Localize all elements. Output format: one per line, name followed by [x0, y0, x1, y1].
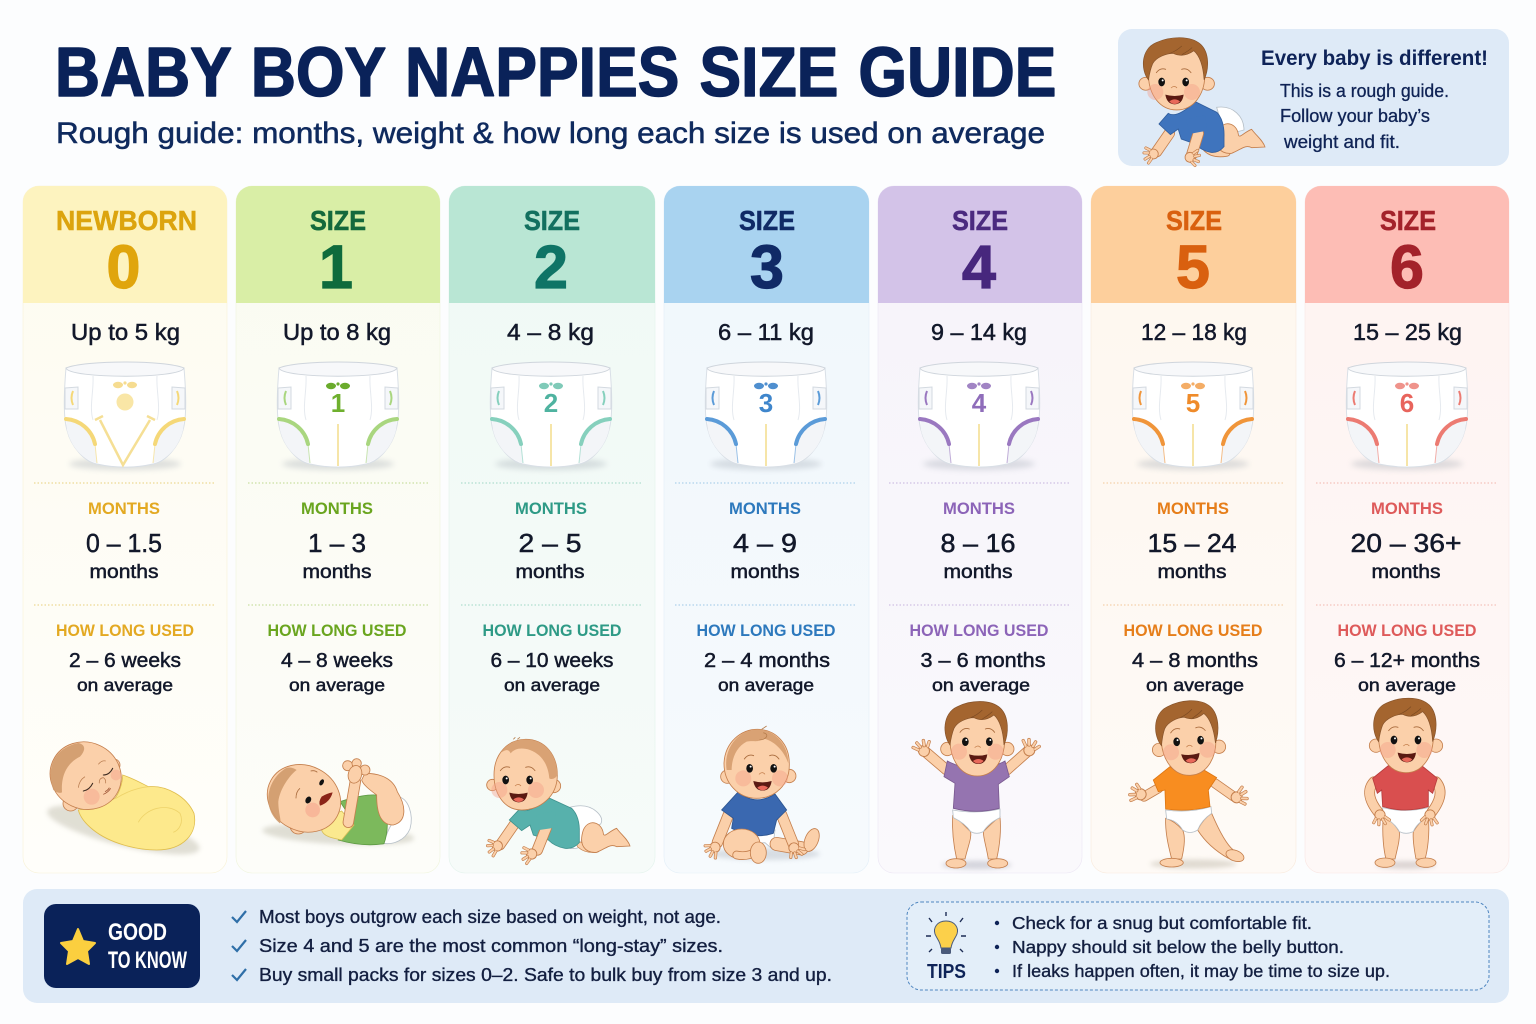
months: 1 – 3	[308, 528, 366, 558]
panel: size 6	[1305, 186, 1509, 873]
header: size 1: 1	[319, 233, 353, 301]
header: size 5: SIZE	[1166, 205, 1222, 236]
panel: every baby is different	[1118, 29, 1509, 166]
months: MONTHS	[1157, 500, 1229, 518]
months: MONTHS	[1371, 500, 1443, 518]
months: months	[516, 562, 584, 583]
header: size 3: 3	[750, 233, 784, 301]
months	[301, 500, 373, 583]
panel: size 4	[878, 186, 1082, 873]
header: newborn	[23, 186, 227, 303]
text: rough guide note	[1280, 81, 1449, 152]
header: size 3	[664, 186, 869, 303]
header: size 6	[1305, 186, 1509, 303]
months	[86, 500, 162, 583]
header: size 4: 4	[962, 233, 996, 301]
illustration: toddler arms raised	[912, 701, 1040, 869]
months: 2 – 5	[518, 528, 582, 558]
months	[729, 500, 801, 583]
nappy illustration	[277, 362, 399, 470]
header: size 2: 2	[534, 233, 568, 301]
months: months	[944, 562, 1012, 583]
months: 20 – 36+	[1350, 528, 1462, 558]
how long used: 4 – 8 weeks	[281, 649, 393, 672]
panel: tips	[907, 902, 1489, 990]
how long used: on average	[1146, 675, 1244, 695]
months: MONTHS	[88, 500, 160, 518]
nappy illustration	[918, 362, 1040, 470]
months: MONTHS	[515, 500, 587, 518]
text: rough guide note: Follow your baby’s	[1280, 106, 1430, 126]
how long used	[910, 622, 1049, 695]
months: months	[1372, 562, 1440, 583]
panel: size 5	[1091, 186, 1296, 873]
how long used: HOW LONG USED	[1338, 622, 1477, 640]
weight: Up to 5 kg	[71, 319, 180, 345]
months: 15 – 24	[1148, 528, 1236, 558]
header: size 5: 5	[1176, 233, 1210, 301]
months	[940, 500, 1016, 583]
months: 8 – 16	[940, 528, 1016, 558]
months: MONTHS	[943, 500, 1015, 518]
months: months	[1158, 562, 1226, 583]
months: months	[730, 562, 800, 583]
text: rough guide note: weight and fit.	[1283, 132, 1400, 152]
how long used: on average	[77, 675, 173, 695]
nappy illustration	[490, 362, 612, 470]
badge: good to know	[44, 904, 200, 988]
how long used: HOW LONG USED	[696, 622, 836, 640]
how long used	[56, 622, 194, 695]
panel: size 1	[236, 186, 440, 873]
how long used: HOW LONG USED	[482, 622, 622, 640]
header: newborn: 0	[107, 233, 140, 301]
how long used: HOW LONG USED	[56, 622, 194, 640]
header: size 2: SIZE	[524, 205, 580, 236]
nappy illustration: 4	[972, 388, 987, 418]
months: months	[302, 562, 372, 583]
header: size 4: SIZE	[952, 205, 1008, 236]
how long used: on average	[932, 675, 1030, 695]
badge: good to know: TO KNOW	[108, 947, 187, 974]
illustration: toddler walking	[1128, 699, 1248, 869]
header: size 4	[878, 186, 1082, 303]
panel: newborn size 0	[23, 186, 227, 873]
header: size 6: 6	[1390, 233, 1424, 301]
header: size 1: SIZE	[310, 205, 366, 236]
text: rough guide note: This is a rough guide.	[1280, 81, 1449, 101]
how long used: HOW LONG USED	[910, 622, 1049, 640]
weight: 6 – 11 kg	[718, 319, 814, 345]
weight: 15 – 25 kg	[1353, 319, 1462, 345]
weight: 12 – 18 kg	[1141, 319, 1247, 345]
panel: size 3	[664, 186, 869, 873]
list: good to know points: Size 4 and 5 are the most common “long-stay” sizes.	[259, 936, 723, 956]
list: tips: If leaks happen often, it may be time to size up.	[1012, 961, 1390, 981]
nappy illustration: 5	[1186, 388, 1200, 418]
weight: Up to 8 kg	[283, 319, 391, 345]
illustration: crawling baby	[486, 737, 630, 864]
how long used: on average	[289, 675, 385, 695]
months	[1148, 500, 1236, 583]
list: good to know points: Most boys outgrow each size based on weight, not age.	[259, 907, 721, 927]
how long used: on average	[504, 675, 600, 695]
header: size 6: SIZE	[1380, 205, 1436, 236]
months	[1350, 500, 1462, 583]
months	[515, 500, 587, 583]
how long used	[268, 622, 407, 695]
how long used: 6 – 10 weeks	[490, 649, 614, 672]
nappy illustration: 1	[331, 388, 345, 418]
nappy illustration: 3	[759, 388, 773, 418]
nappy illustration	[705, 362, 827, 470]
header: size 3: SIZE	[739, 205, 795, 236]
weight: 9 – 14 kg	[931, 319, 1027, 345]
illustration: baby lying on back	[255, 752, 415, 848]
how long used: 2 – 4 months	[704, 649, 830, 672]
panel: bottom notes	[23, 889, 1509, 1003]
nappy illustration: 6	[1400, 388, 1414, 418]
header: size 1	[236, 186, 440, 303]
list: tips	[995, 913, 1390, 981]
weight: 4 – 8 kg	[507, 319, 594, 345]
how long used	[696, 622, 836, 695]
list: good to know points: Buy small packs for sizes 0–2. Safe to bulk buy from size 3 and up.	[259, 965, 832, 985]
header: size 5	[1091, 186, 1296, 303]
months: MONTHS	[301, 500, 373, 518]
header: newborn: NEWBORN	[56, 205, 197, 236]
icon: lightbulb	[926, 912, 966, 954]
nappy illustration	[1132, 362, 1254, 470]
illustration: swaddled newborn	[39, 730, 203, 864]
list: good to know points	[232, 907, 832, 985]
panel: tips: TIPS	[927, 961, 966, 983]
header: size 2	[449, 186, 655, 303]
how long used: 6 – 12+ months	[1334, 649, 1480, 672]
badge: good to know: GOOD	[108, 919, 167, 946]
how long used: 2 – 6 weeks	[69, 649, 181, 672]
months: 0 – 1.5	[86, 528, 162, 558]
months: MONTHS	[729, 500, 801, 518]
title: BABY BOY NAPPIES SIZE GUIDE	[55, 34, 1056, 112]
icon: crawling baby	[1139, 38, 1265, 166]
months: 4 – 9	[733, 528, 797, 558]
illustration: sitting baby	[703, 726, 822, 863]
how long used: HOW LONG USED	[1124, 622, 1263, 640]
subtitle: Rough guide: months, weight & how long each size is used on average	[56, 117, 1045, 150]
illustration: toddler hands on hips	[1369, 698, 1443, 869]
how long used: on average	[1358, 675, 1456, 695]
how long used	[1334, 622, 1480, 695]
how long used: HOW LONG USED	[268, 622, 407, 640]
text: every baby is different heading: Every baby is different!	[1261, 47, 1488, 70]
nappy illustration	[64, 362, 186, 470]
months: months	[90, 562, 158, 583]
nappy illustration	[1346, 362, 1468, 470]
list: tips: Nappy should sit below the belly button.	[1012, 937, 1344, 957]
how long used	[482, 622, 622, 695]
nappy illustration: 2	[544, 388, 558, 418]
how long used: 3 – 6 months	[920, 649, 1046, 672]
list: tips: Check for a snug but comfortable fit.	[1012, 913, 1312, 933]
panel: size 2	[449, 186, 655, 873]
how long used: 4 – 8 months	[1132, 649, 1258, 672]
how long used: on average	[718, 675, 814, 695]
icon: star	[61, 929, 95, 964]
how long used	[1124, 622, 1263, 695]
